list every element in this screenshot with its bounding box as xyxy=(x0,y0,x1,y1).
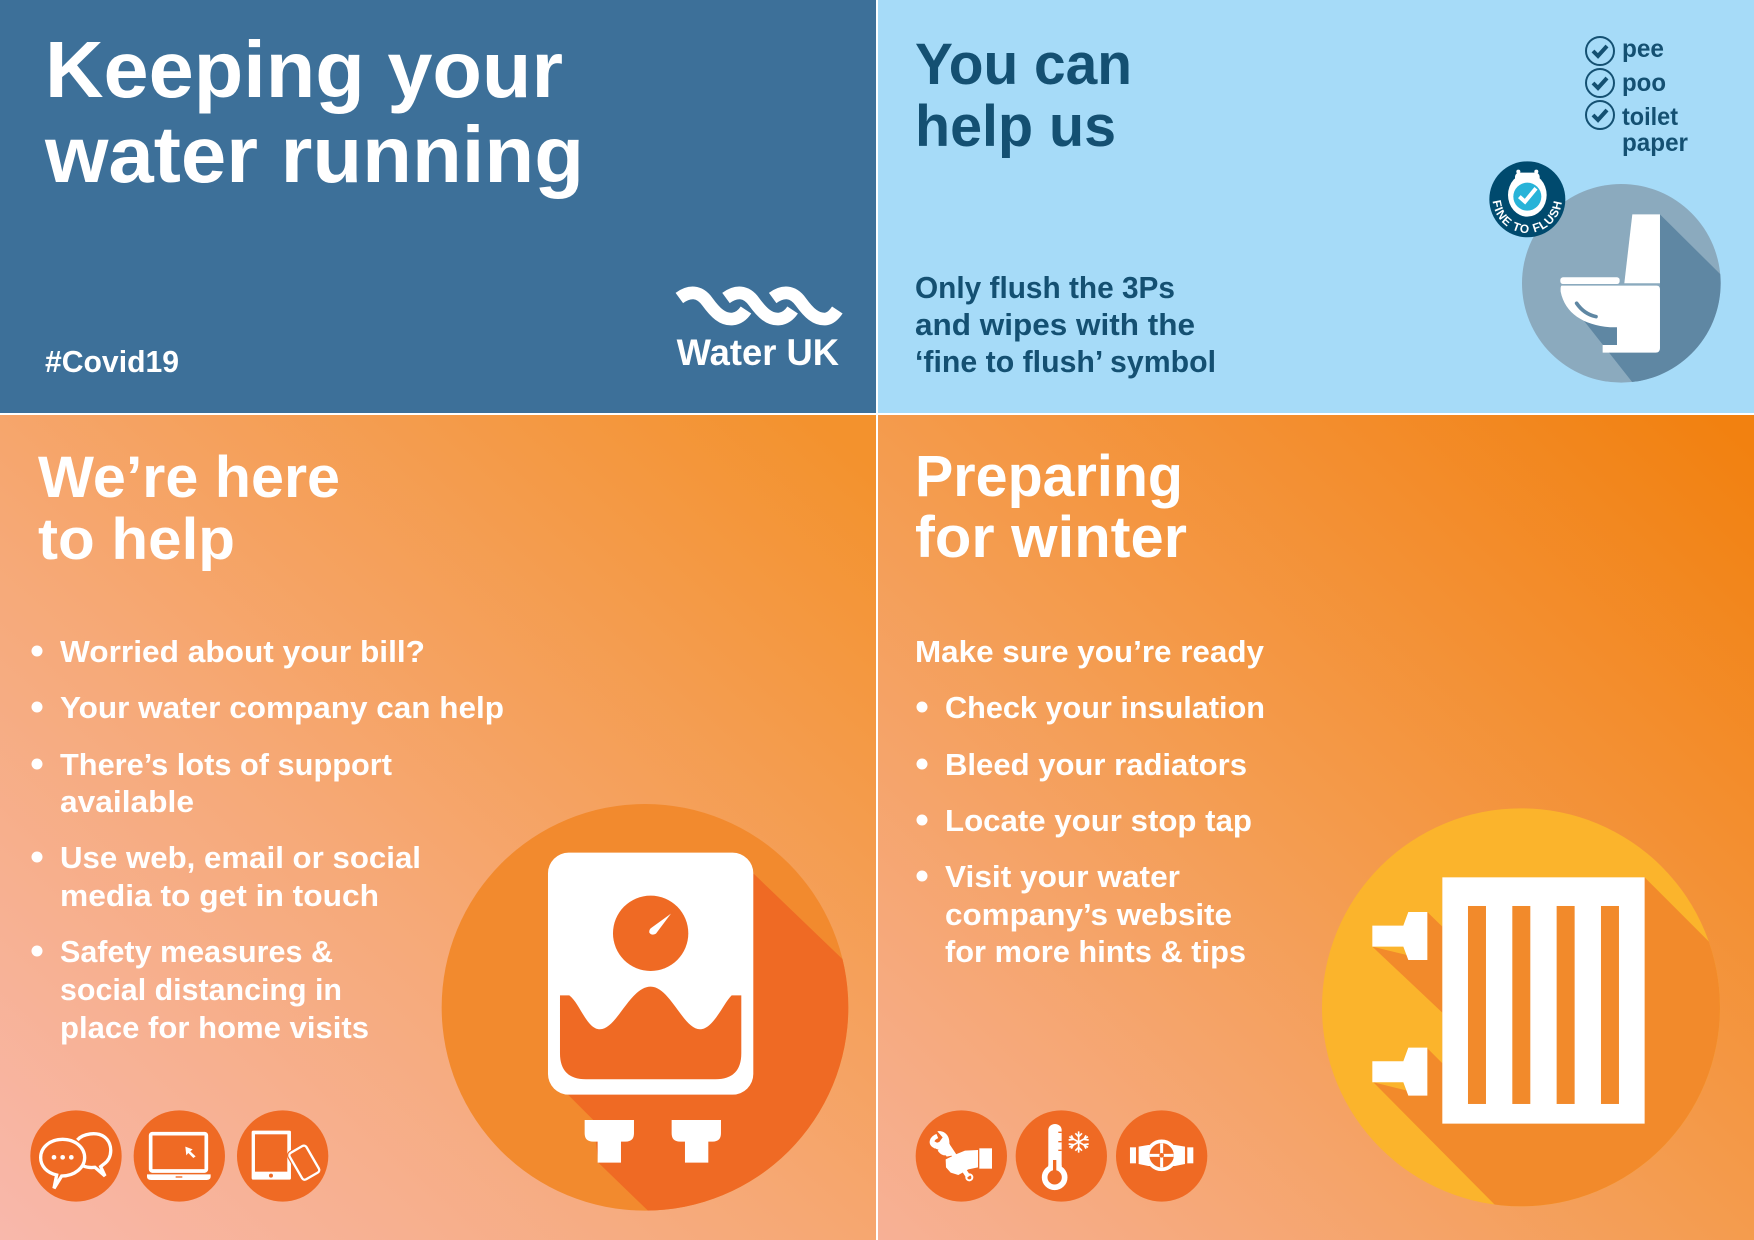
intro and bullet list: company’s website xyxy=(945,897,1232,932)
body text xyxy=(915,270,1216,379)
intro and bullet list: for more hints & tips xyxy=(945,934,1246,969)
bullet list: available xyxy=(60,784,194,819)
body text: and wipes with the xyxy=(915,307,1195,342)
heading: for winter xyxy=(915,505,1187,570)
icon: boiler in circle xyxy=(442,804,848,1211)
intro and bullet list: Check your insulation xyxy=(945,690,1265,725)
icon: speech bubbles xyxy=(30,1110,122,1202)
body text: Only flush the 3Ps xyxy=(915,270,1175,305)
icons: contact methods xyxy=(30,1110,328,1202)
panel: preparing for winter xyxy=(878,415,1754,1240)
heading xyxy=(915,32,1132,159)
bullet list: Safety measures & xyxy=(60,934,333,969)
bullet list xyxy=(32,634,504,1045)
checklist: 3Ps xyxy=(1586,35,1688,157)
panel: keeping your water running xyxy=(0,0,876,413)
intro and bullet list: Visit your water xyxy=(945,859,1180,894)
checklist: 3Ps: toilet xyxy=(1622,103,1679,131)
heading: help us xyxy=(915,94,1116,159)
icons: winter preparation xyxy=(916,1110,1207,1202)
intro and bullet list: Locate your stop tap xyxy=(945,803,1252,838)
icon: laptop xyxy=(134,1110,225,1202)
heading: to help xyxy=(38,507,235,572)
icon: radiator in circle xyxy=(1322,808,1720,1206)
checklist: 3Ps: poo xyxy=(1622,69,1666,97)
bullet list: Your water company can help xyxy=(60,690,504,725)
bullet list: Worried about your bill? xyxy=(60,634,425,669)
bullet list: media to get in touch xyxy=(60,878,379,913)
intro and bullet list xyxy=(915,634,1265,969)
title: Keeping your xyxy=(45,25,563,114)
hashtag: #Covid19 xyxy=(45,344,179,379)
bullet list: Use web, email or social xyxy=(60,840,421,875)
icon: hand with wrench xyxy=(916,1110,1007,1202)
bullet list: There’s lots of support xyxy=(60,747,392,782)
intro and bullet list: Bleed your radiators xyxy=(945,747,1247,782)
logo: Water UK xyxy=(677,293,839,373)
panel: we're here to help xyxy=(0,415,930,1240)
bullet list: social distancing in xyxy=(60,972,342,1007)
title: water running xyxy=(44,110,584,199)
checklist: 3Ps: paper xyxy=(1622,129,1688,157)
heading xyxy=(38,445,340,572)
bullet list: place for home visits xyxy=(60,1010,369,1045)
checklist: 3Ps: pee xyxy=(1622,35,1664,63)
intro and bullet list: Make sure you’re ready xyxy=(915,634,1265,669)
panel: you can help us xyxy=(878,0,1754,413)
title xyxy=(44,25,584,199)
heading: Preparing xyxy=(915,444,1183,509)
icon: fine to flush badge xyxy=(1489,161,1566,238)
icon: thermometer and snowflake xyxy=(1016,1110,1107,1202)
heading: We’re here xyxy=(38,445,340,510)
logo: Water UK: Water UK xyxy=(677,331,839,373)
heading: You can xyxy=(915,32,1132,97)
icon: stop tap valve xyxy=(1116,1110,1207,1202)
icon: fine to flush badge: FINE TO FLUSH xyxy=(1492,200,1562,233)
heading xyxy=(915,444,1187,570)
icon: tablet and phone xyxy=(237,1110,328,1202)
icon: toilet in circle xyxy=(1522,184,1721,383)
body text: ‘fine to flush’ symbol xyxy=(915,344,1216,379)
